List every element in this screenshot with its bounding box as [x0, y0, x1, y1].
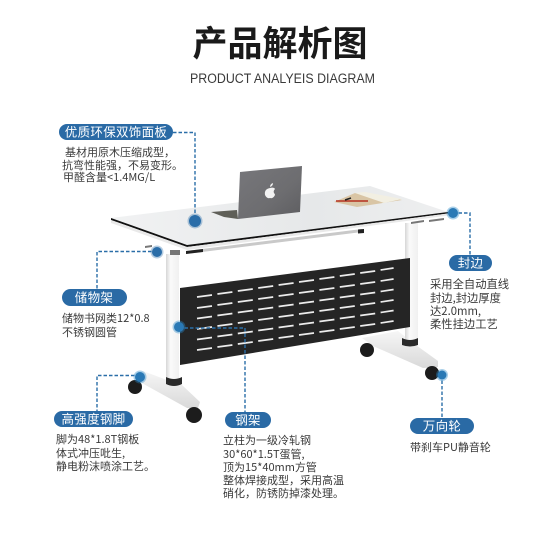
desktop — [111, 186, 448, 250]
panel: 高强度钢脚: 静电粉沫喷涂工艺。 — [56, 458, 155, 474]
panel: 万向轮: 带刹车PU静音轮 — [410, 439, 491, 455]
modesty panel — [180, 258, 410, 365]
marker dots — [134, 206, 460, 384]
callout lines — [97, 132, 470, 418]
panel: 封边: 采用全自动直线 — [430, 276, 509, 292]
panel: 钢架 — [223, 410, 344, 501]
panel: 封边 — [430, 252, 509, 332]
right leg and foot — [360, 223, 439, 380]
panel: 封边: 柔性挂边工艺 — [430, 316, 498, 332]
panel: 优质环保双饰面板 — [59, 122, 183, 185]
panel: 封边: 达2.0mm, — [430, 303, 481, 319]
panel: 钢架: 立柱为一级冷轧钢 — [223, 432, 311, 448]
panel: 优质环保双饰面板: 基材用原木压缩成型， — [65, 144, 175, 160]
panel: 封边: 封边,封边厚度 — [430, 290, 501, 306]
panel: 储物架 — [62, 287, 150, 340]
laptop — [211, 166, 302, 219]
panel: 高强度钢脚: 体式冲压吡生, — [56, 445, 125, 461]
panel: 钢架: 顶为15*40mm方管 — [223, 459, 317, 475]
panel: 封边: 封边 — [458, 252, 483, 272]
panel: 万向轮 — [410, 416, 491, 455]
under-desk rail — [186, 229, 362, 254]
panel: 钢架: 整体焊接成型，采用高温 — [223, 472, 344, 488]
desk illustration — [111, 166, 448, 423]
panel: 高强度钢脚: 高强度钢脚 — [61, 408, 126, 428]
panel: 钢架: 钢架 — [235, 410, 261, 428]
panel: 钢架: 30*60*1.5T蛋管, — [223, 446, 305, 462]
panel: 万向轮: 万向轮 — [423, 416, 461, 434]
panel: 钢架: 硝化，防锈防掉漆处理。 — [223, 485, 344, 501]
panel: 高强度钢脚 — [54, 408, 155, 474]
panel: 优质环保双饰面板: 优质环保双饰面板 — [65, 122, 167, 140]
panel: 储物架: 储物架 — [75, 287, 113, 306]
panel: 储物架: 不锈钢圆管 — [62, 324, 117, 340]
left leg and foot — [128, 254, 202, 423]
panel: 储物架: 储物书网类12*0.8 — [62, 310, 150, 326]
panel: 优质环保双饰面板: 甲醛含量<1.4MG/L — [63, 169, 155, 185]
title: 产品解析图 — [192, 16, 368, 67]
apple logo — [265, 183, 275, 198]
panel: 优质环保双饰面板: 抗弯性能强，不易变形。 — [62, 157, 183, 173]
notebook and pen — [334, 192, 402, 207]
panel: 高强度钢脚: 脚为48*1.8T钢板 — [56, 431, 139, 447]
subtitle: PRODUCT ANALYEIS DIAGRAM — [190, 71, 375, 86]
